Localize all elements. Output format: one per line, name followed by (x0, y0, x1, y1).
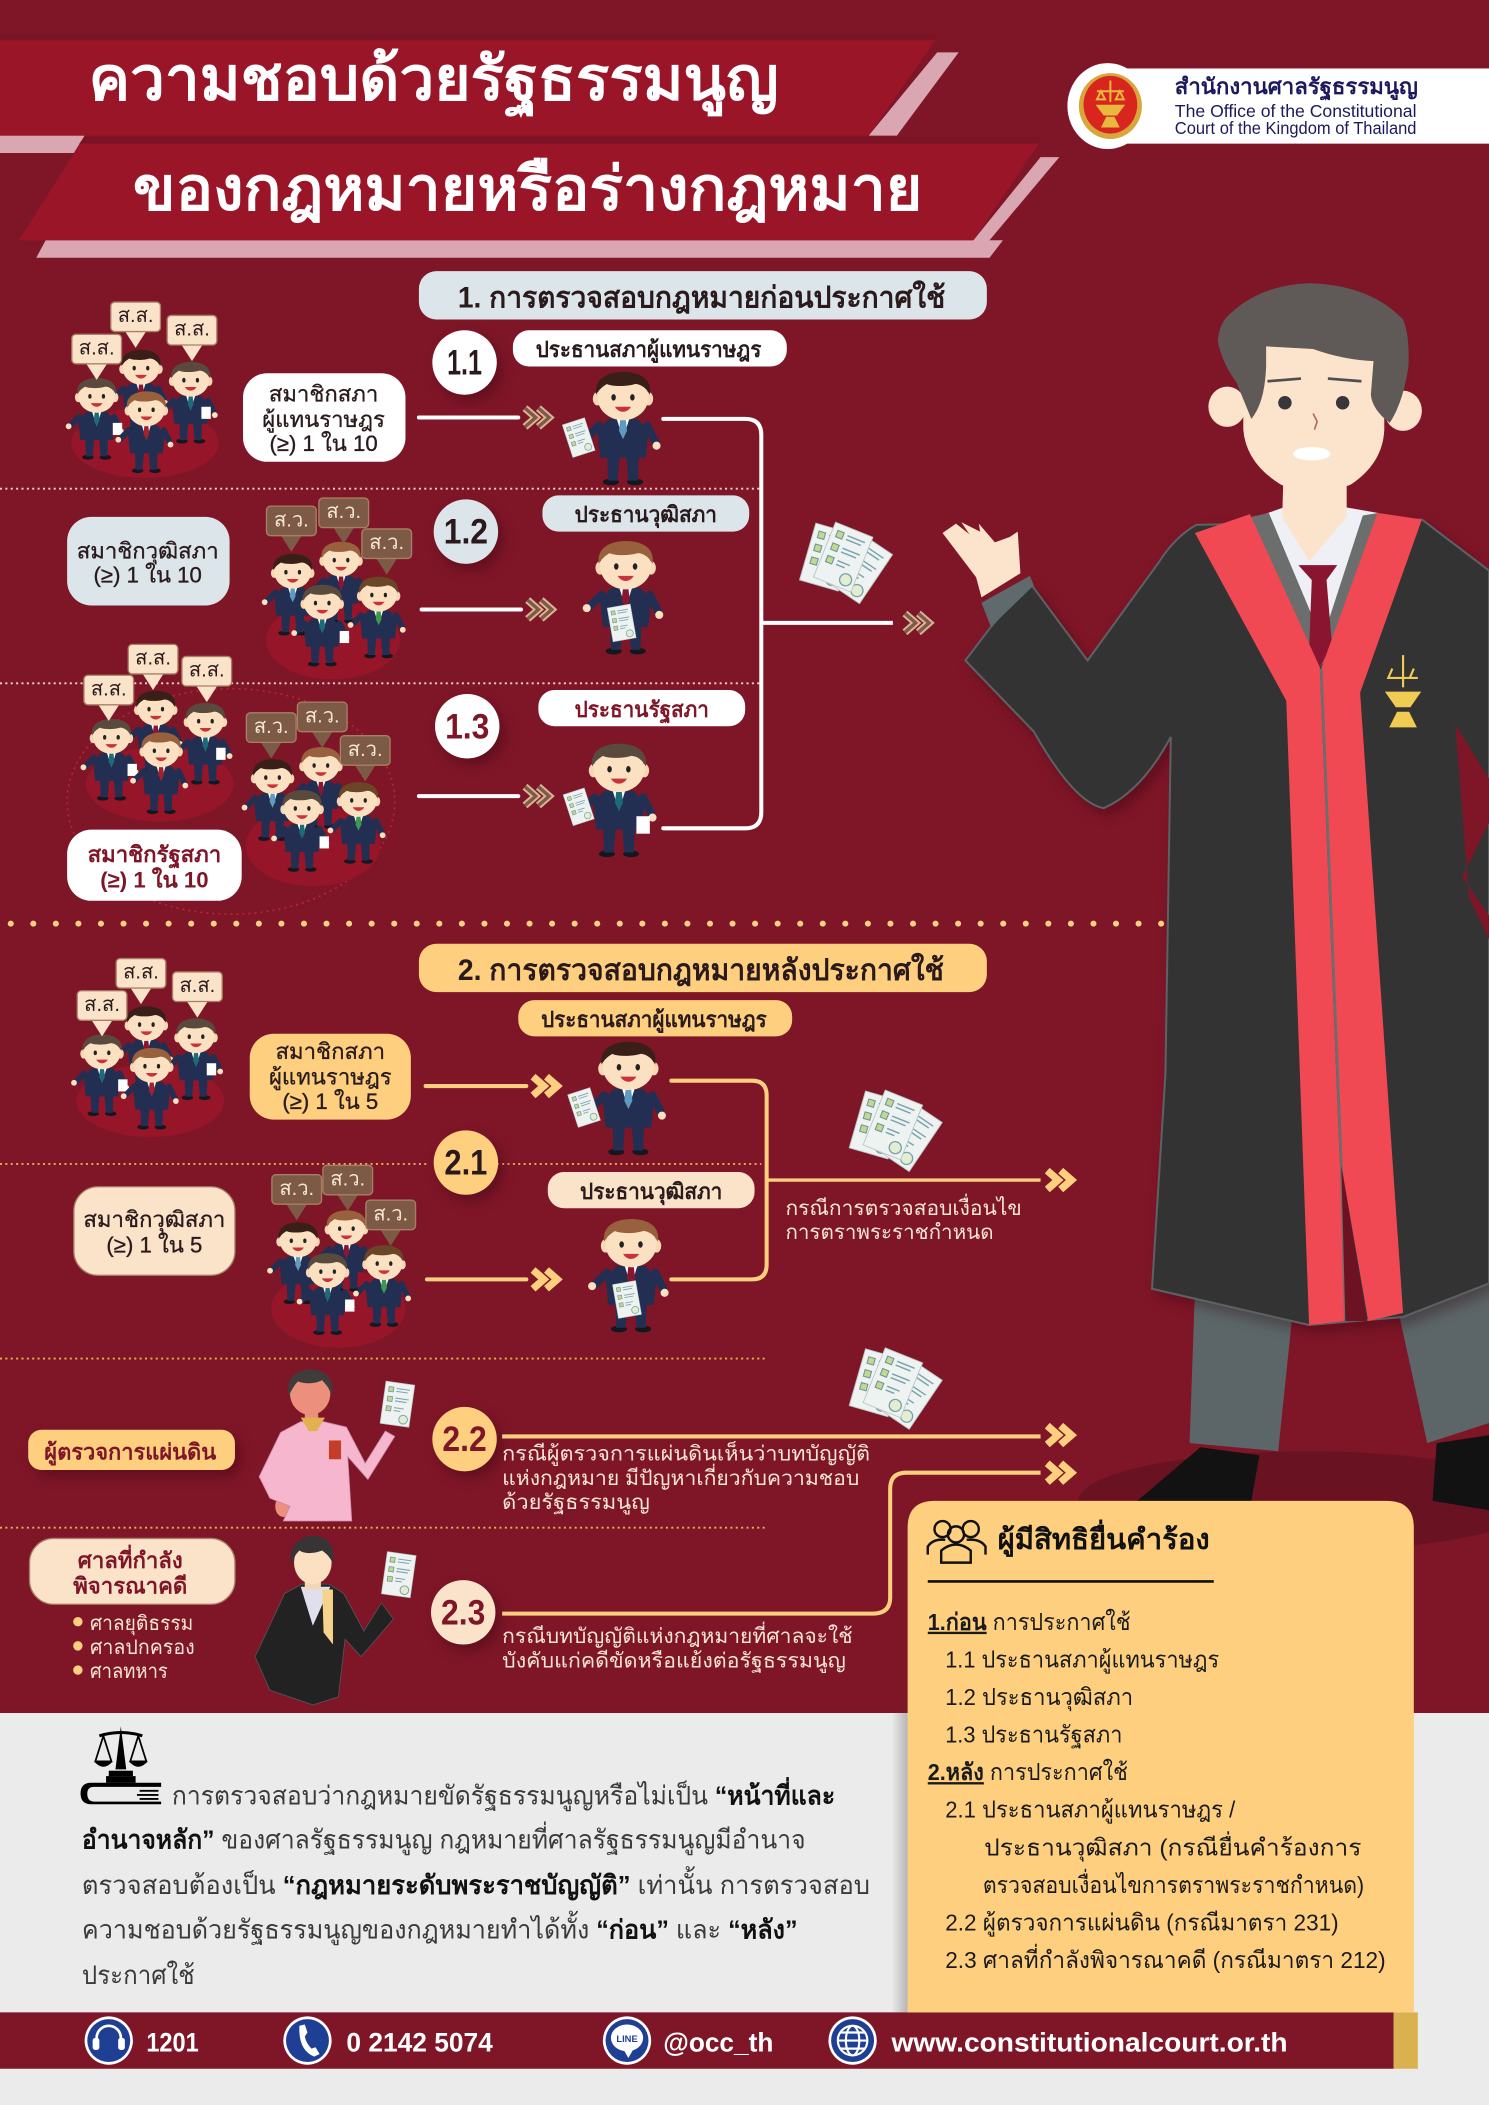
badge 1.1 (432, 330, 497, 395)
nose (1313, 413, 1317, 430)
row 1.3: joint session dotted ellipse (67, 689, 395, 914)
arrow 2.1 top (426, 1077, 557, 1095)
documents icon (849, 1348, 942, 1429)
website: www.constitutionalcourt.or.th (890, 2027, 1288, 2057)
result arrow 2.1 (767, 1171, 1071, 1189)
icon: people with question marks (928, 1521, 986, 1563)
note 2.2: ด้วยรัฐธรรมนูญ (502, 1491, 650, 1515)
list of petitioners: 2.หลัง การประกาศใช้ (928, 1759, 1128, 1785)
badge 2.2: 2.2 (442, 1420, 487, 1459)
speaker figure 1.2 (583, 541, 663, 654)
badge 2.3: 2.3 (441, 1593, 485, 1632)
english name line 2: Court of the Kingdom of Thailand (1175, 118, 1416, 138)
dotted divider (0, 682, 761, 684)
explanatory paragraph: ตรวจสอบต้องเป็น “กฎหมายระดับพระราชบัญญัติ” เท่านั้น การตรวจสอบ (82, 1866, 870, 1901)
bubble (116, 959, 166, 1004)
documents icon (849, 1090, 942, 1171)
badge 1.2: 1.2 (444, 513, 488, 552)
box: parliament members 1 in 10 (67, 830, 242, 901)
box: senate members 1 in 5: สมาชิกวุฒิสภา (83, 1207, 225, 1233)
bubble: ส.ส. (84, 994, 120, 1016)
explanatory paragraph: การตรวจสอบว่ากฎหมายขัดรัฐธรรมนูญหรือไม่เป็น “หน้าที่และ (172, 1776, 835, 1811)
grey lapels (1251, 513, 1379, 667)
arrow 1.1 (419, 408, 549, 427)
bubble: ส.ส. (118, 305, 153, 327)
bubble (77, 991, 127, 1036)
office logo band (1067, 63, 1489, 149)
office name: สำนักงานศาลรัฐธรรมนูญ (1175, 74, 1418, 101)
arrow 2.3 (502, 1463, 1071, 1614)
label: senate speaker (548, 1172, 755, 1208)
box: house members 1 in 5: (≥) 1 ใน 5 (282, 1089, 378, 1114)
row 1.3: senators group (242, 702, 390, 886)
note 2.1 (785, 1194, 1022, 1244)
explanatory paragraph: อำนาจหลัก” ของศาลรัฐธรรมนูญ กฎหมายที่ศาลรัฐธรรมนูญมีอำนาจ (82, 1822, 806, 1856)
title line 1: ความชอบด้วยรัฐธรรมนูญ (89, 44, 779, 117)
list of petitioners (928, 1609, 1386, 1973)
title rule (928, 1580, 1214, 1582)
label: house speaker: ประธานสภาผู้แทนราษฎร (536, 337, 761, 364)
label: senate speaker: ประธานวุฒิสภา (580, 1179, 722, 1206)
box: senate members 1 in 10: (≥) 1 ใน 10 (94, 563, 202, 588)
badge 1.2 (434, 499, 498, 564)
bracket connector 2.1 (671, 1081, 767, 1279)
bubble: ส.ส. (91, 678, 127, 700)
arrow 1.3 (419, 787, 549, 805)
note 2.1: กรณีการตรวจสอบเงื่อนไข (785, 1194, 1022, 1220)
dotted divider (0, 1358, 767, 1360)
bubble (182, 656, 232, 702)
ears (1208, 387, 1246, 427)
bubble (319, 498, 369, 544)
explanatory paragraph (82, 1776, 870, 1990)
hotline number: 1201 (146, 2027, 199, 2057)
label: ombudsman (28, 1430, 235, 1470)
label: parliament president: ประธานรัฐสภา (575, 697, 709, 724)
robe (965, 520, 1489, 1325)
label: senate speaker: ประธานวุฒิสภา (575, 502, 717, 529)
box: house members 1 in 10: (≥) 1 ใน 10 (269, 431, 378, 456)
court types list: ศาลยุติธรรม (90, 1613, 193, 1636)
eyes (1278, 396, 1292, 409)
bubble: ส.ส. (79, 337, 115, 359)
box: trial court: พิจารณาคดี (73, 1574, 187, 1599)
icon: headset (85, 2016, 133, 2065)
bubble: ส.ว. (373, 1203, 408, 1225)
note 2.3: บังคับแก่คดีขัดหรือแย้งต่อรัฐธรรมนูญ (502, 1649, 846, 1673)
brows (1267, 379, 1361, 381)
result arrow section 1 (761, 614, 929, 632)
row 1.3: house group (81, 644, 234, 822)
speaker figure 1.3 (563, 744, 657, 857)
arrow 2.1 bottom (427, 1270, 557, 1289)
card: eligible petitioners (908, 1501, 1414, 2012)
shoes (1137, 1435, 1489, 1510)
bubble: ส.ส. (179, 975, 215, 997)
bubble: ส.ว. (348, 739, 383, 761)
list of petitioners: 2.2 ผู้ตรวจการแผ่นดิน (กรณีมาตรา 231) (945, 1909, 1339, 1937)
box: senate members 1 in 5: (≥) 1 ใน 5 (106, 1233, 202, 1258)
icon: line (603, 2016, 651, 2065)
box: senate members 1 in 10 (67, 517, 230, 605)
bubble (167, 315, 217, 361)
box: trial court (30, 1538, 235, 1604)
speaker figure 2.1 top (568, 1042, 666, 1155)
section 1 heading (419, 271, 987, 320)
speaker figure 1.1 (562, 372, 661, 485)
box: house members 1 in 5: ผู้แทนราษฎร (269, 1065, 392, 1091)
court types list: ศาลทหาร (90, 1661, 168, 1683)
english name line 1: The Office of the Constitutional (1175, 101, 1416, 121)
bubble: ส.ว. (369, 532, 404, 554)
list of petitioners: 1.1 ประธานสภาผู้แทนราษฎร (945, 1646, 1219, 1674)
list of petitioners: ประธานวุฒิสภา (กรณียื่นคำร้องการ (984, 1830, 1361, 1861)
scales of justice icon (81, 1726, 161, 1804)
badge 1.1: 1.1 (447, 344, 482, 383)
title line 2: ของกฎหมายหรือร่างกฎหมาย (133, 154, 922, 222)
bubble: ส.ว. (330, 1168, 365, 1190)
list of petitioners: ตรวจสอบเงื่อนไขการตราพระราชกำหนด) (983, 1868, 1364, 1898)
bubble (173, 972, 222, 1018)
grey lower panel (0, 1713, 1489, 2105)
label: house speaker (513, 330, 787, 366)
card title: ผู้มีสิทธิยื่นคำร้อง (998, 1519, 1210, 1557)
gold emblem (1387, 655, 1419, 726)
floor shadow (1078, 1451, 1489, 1551)
icon: phone (283, 2016, 332, 2065)
dotted divider (0, 488, 761, 490)
bubble (272, 1175, 322, 1220)
bubble (340, 736, 390, 781)
big judge figure (943, 283, 1489, 1551)
bubble: ส.ว. (254, 716, 289, 738)
bubble (297, 702, 347, 748)
bubble: ส.ว. (279, 1178, 314, 1200)
red facing left (1195, 514, 1345, 1325)
trousers (1190, 1275, 1489, 1451)
row 1.1: members of house group (66, 302, 219, 478)
bubble (323, 1165, 373, 1211)
explanatory paragraph: ความชอบด้วยรัฐธรรมนูญของกฎหมายทำได้ทั้ง “ก่อน” และ “หลัง” (82, 1911, 798, 1946)
box: parliament members 1 in 10: (≥) 1 ใน 10 (100, 866, 209, 892)
judge figure small (255, 1536, 416, 1705)
neck (1282, 470, 1347, 561)
icon: globe (828, 2016, 877, 2065)
phone number: 0 2142 5074 (346, 2027, 493, 2057)
bubble: ส.ว. (326, 501, 361, 523)
dotted divider (0, 1527, 767, 1529)
box: house members 1 in 5: สมาชิกสภา (276, 1039, 385, 1064)
badge 2.1: 2.1 (444, 1144, 487, 1183)
documents icon (800, 522, 893, 604)
note 2.2 (502, 1440, 870, 1515)
cuff (981, 576, 1034, 627)
box: house members 1 in 10: สมาชิกสภา (269, 381, 378, 406)
bubble (267, 506, 316, 552)
badge 2.1 (434, 1130, 498, 1195)
bubble: ส.ว. (305, 705, 340, 727)
red facing right (1321, 513, 1422, 1321)
label: parliament president (538, 690, 745, 726)
list of petitioners: 1.3 ประธานรัฐสภา (945, 1722, 1122, 1749)
court types list: ศาลปกครอง (90, 1637, 195, 1659)
mouth (1293, 447, 1331, 460)
bubble: ส.ส. (135, 648, 171, 670)
robe slit (1341, 1165, 1367, 1321)
title banners (0, 34, 1059, 258)
label: house speaker: ประธานสภาผู้แทนราษฎร (541, 1007, 767, 1034)
badge 2.2 (432, 1407, 497, 1471)
speaker figure 2.1 bottom (588, 1219, 669, 1332)
bubble: ส.ว. (274, 509, 309, 531)
footer gold end (1394, 2012, 1418, 2069)
list of petitioners: 1.2 ประธานวุฒิสภา (945, 1684, 1133, 1711)
footer band (0, 2012, 1394, 2069)
box: senate members 1 in 5 (74, 1187, 235, 1275)
label: senate speaker (542, 495, 749, 532)
section 1 heading: 1. การตรวจสอบกฎหมายก่อนประกาศใช้ (458, 279, 945, 314)
section divider dots (11, 921, 1163, 926)
hair (1218, 283, 1409, 423)
row 2.1: senators group (267, 1165, 416, 1348)
badge 2.3 (431, 1580, 495, 1645)
box: house members 1 in 10 (243, 373, 405, 462)
box: trial court: ศาลที่กำลัง (78, 1544, 183, 1573)
seal (1079, 73, 1142, 139)
badge 1.3 (435, 694, 499, 758)
tie (1298, 565, 1337, 667)
bubble (246, 713, 296, 758)
card shadow on grey panel (892, 1713, 908, 2012)
bubble: ส.ส. (174, 319, 210, 341)
note 2.1: การตราพระราชกำหนด (785, 1221, 994, 1244)
bubble (362, 529, 412, 575)
bracket connector section 1 (663, 419, 761, 828)
bubble (72, 334, 122, 380)
section 2 heading (419, 944, 987, 992)
badge 1.3: 1.3 (445, 707, 489, 746)
label: house speaker (518, 1000, 792, 1036)
hand (943, 522, 1020, 597)
list of petitioners: 1.ก่อน การประกาศใช้ (928, 1609, 1131, 1635)
note 2.2: กรณีผู้ตรวจการแผ่นดินเห็นว่าบทบัญญัติ (502, 1440, 870, 1467)
bubble (111, 302, 160, 348)
label: ombudsman: ผู้ตรวจการแผ่นดิน (44, 1439, 216, 1466)
bubble (366, 1200, 416, 1246)
line account: @occ_th (663, 2027, 773, 2057)
box: house members 1 in 5 (250, 1034, 411, 1120)
arrow 2.2 (502, 1426, 1071, 1445)
sleeve gap (1455, 725, 1489, 940)
note 2.2: แห่งกฎหมาย มีปัญหาเกี่ยวกับความชอบ (502, 1464, 859, 1490)
note 2.3 (502, 1622, 853, 1673)
ombudsman figure (259, 1369, 415, 1521)
bubble: ส.ส. (189, 660, 225, 682)
list of petitioners: 2.1 ประธานสภาผู้แทนราษฎร / (945, 1797, 1236, 1825)
shirt (1257, 507, 1378, 667)
explanatory paragraph: ประกาศใช้ (82, 1960, 195, 1990)
arrow 1.2 (422, 600, 552, 619)
bubble (84, 675, 134, 721)
box: parliament members 1 in 10: สมาชิกรัฐสภา (88, 842, 221, 869)
dotted divider with gap (0, 1163, 761, 1165)
box: house members 1 in 10: ผู้แทนราษฎร (262, 407, 385, 433)
row 2.1: house group (71, 959, 224, 1137)
bubble: ส.ส. (123, 962, 159, 984)
face (1243, 342, 1384, 492)
court types list (73, 1613, 195, 1683)
box: senate members 1 in 10: สมาชิกวุฒิสภา (77, 538, 219, 564)
note 2.3: กรณีบทบัญญัติแห่งกฎหมายที่ศาลจะใช้ (502, 1622, 853, 1648)
section 2 heading: 2. การตรวจสอบกฎหมายหลังประกาศใช้ (458, 952, 944, 987)
row 1.2: senators group (262, 498, 412, 679)
icon: line: LINE (616, 2033, 638, 2044)
bubble (128, 644, 178, 690)
list of petitioners: 2.3 ศาลที่กำลังพิจารณาคดี (กรณีมาตรา 212) (945, 1943, 1386, 1973)
